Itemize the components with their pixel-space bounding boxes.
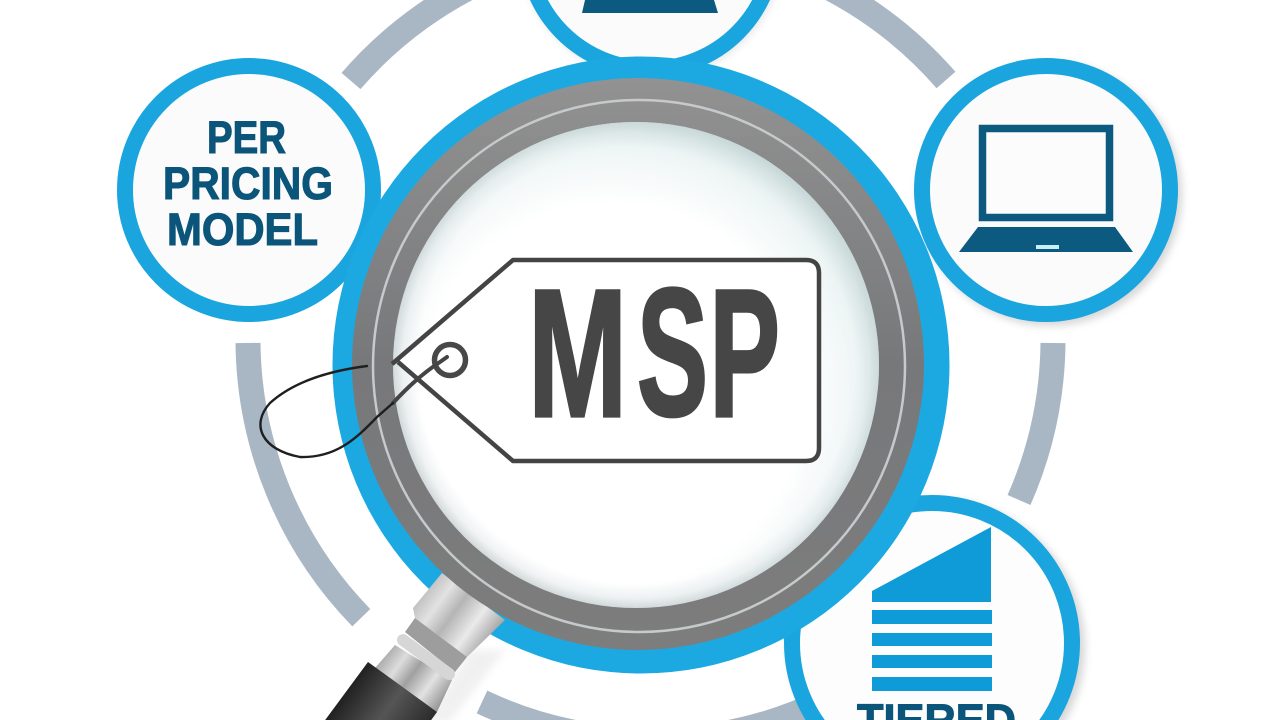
magnifier lens [393,122,879,608]
magnifier gray rim [352,78,924,650]
tag eyelet [434,344,466,376]
magnifier blue backing disc [332,56,950,674]
icon: laptop [959,128,1133,252]
panel: top circle with laptop [530,0,774,65]
segmented gray orbit ring [248,0,1053,720]
price tag with MSP label [392,250,819,461]
heading: MSP: P [710,251,780,455]
tag string loop [260,357,447,457]
icon: magnifier handle [320,573,505,720]
heading: per pricing model: PRICING [163,158,333,209]
heading: per pricing model: PER [207,112,286,163]
panel: tiered pricing circle [789,499,1085,720]
icon: tier wedge and bars [872,527,992,691]
panel: per pricing model circle [125,66,373,314]
panel: right circle with laptop [918,62,1182,326]
heading: per pricing model: MODEL [167,204,318,255]
heading: per pricing model [165,121,331,246]
heading: MSP: M [528,252,627,455]
heading: MSP: S [637,250,708,454]
heading: MSP [534,286,778,418]
